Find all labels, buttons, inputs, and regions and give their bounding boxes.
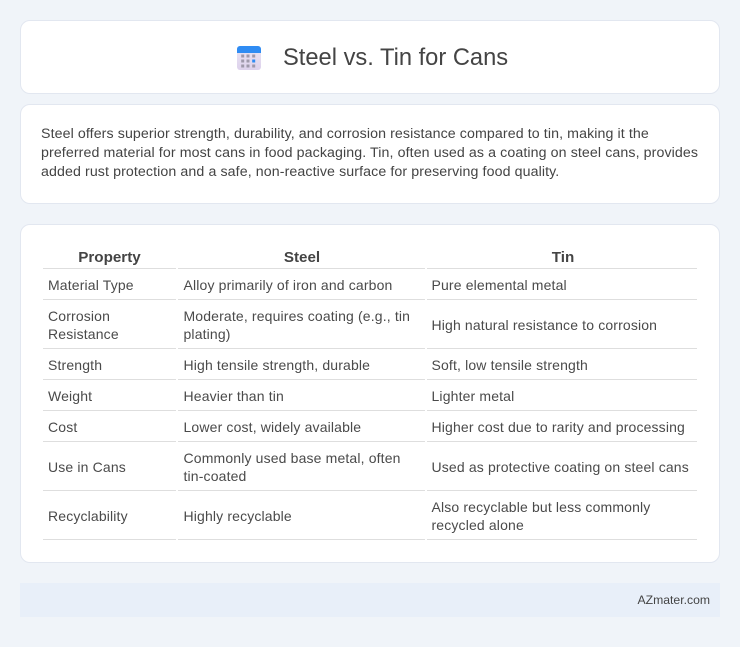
intro text: Steel offers superior strength, durability, and corrosion resistance compared to tin, making it the xyxy=(41,126,649,142)
comparison table xyxy=(43,249,697,540)
row: recyclability xyxy=(48,499,650,533)
row: material type: Material Type xyxy=(48,277,134,293)
row: weight: Heavier than tin xyxy=(184,388,284,404)
intro text xyxy=(41,126,698,180)
row: cost: Higher cost due to rarity and processing xyxy=(432,419,685,435)
row: strength: Strength xyxy=(48,357,102,373)
row: recyclability: Recyclability xyxy=(48,508,128,524)
table header: Tin xyxy=(552,249,574,266)
row: cost: Lower cost, widely available xyxy=(184,419,361,435)
table header: Property xyxy=(78,249,141,266)
title: Steel vs. Tin for Cans xyxy=(283,45,508,71)
row: recyclability: Also recyclable but less commonly xyxy=(432,499,650,515)
row: use in cans: Commonly used base metal, often xyxy=(184,450,401,466)
row: use in cans xyxy=(48,450,689,484)
table card xyxy=(20,224,720,563)
row: corrosion resistance xyxy=(48,308,657,342)
row: strength xyxy=(48,357,588,373)
row: material type: Alloy primarily of iron and carbon xyxy=(184,277,392,293)
row: strength: High tensile strength, durable xyxy=(184,357,370,373)
row: recyclability: recycled alone xyxy=(432,517,524,533)
row: corrosion resistance: Corrosion xyxy=(48,308,110,324)
row: use in cans: tin-coated xyxy=(184,468,246,484)
row: corrosion resistance: plating) xyxy=(184,326,231,342)
row: cost xyxy=(48,419,685,435)
table header xyxy=(78,249,574,266)
row: weight: Lighter metal xyxy=(432,388,514,404)
row: material type xyxy=(48,277,567,293)
row: corrosion resistance: High natural resistance to corrosion xyxy=(432,317,657,333)
icon: calendar xyxy=(237,46,261,70)
row: corrosion resistance: Moderate, requires coating (e.g., tin xyxy=(184,308,410,324)
row: material type: Pure elemental metal xyxy=(432,277,567,293)
intro card xyxy=(20,104,720,204)
table header: Steel xyxy=(284,249,320,266)
row: use in cans: Used as protective coating on steel cans xyxy=(432,459,689,475)
row: use in cans: Use in Cans xyxy=(48,459,126,475)
row: corrosion resistance: Resistance xyxy=(48,326,119,342)
row: weight xyxy=(48,388,514,404)
footer credit: AZmater.com xyxy=(638,593,710,607)
row: weight: Weight xyxy=(48,388,92,404)
row: cost: Cost xyxy=(48,419,77,435)
row: recyclability: Highly recyclable xyxy=(184,508,292,524)
row: strength: Soft, low tensile strength xyxy=(432,357,588,373)
intro text: preferred material for most cans in food packaging. Tin, often used as a coating on steel cans, provides xyxy=(41,145,698,161)
intro text: added rust protection and a safe, non-reactive surface for preserving food quality. xyxy=(41,164,559,180)
header card xyxy=(20,20,720,94)
footer bar xyxy=(20,583,720,617)
